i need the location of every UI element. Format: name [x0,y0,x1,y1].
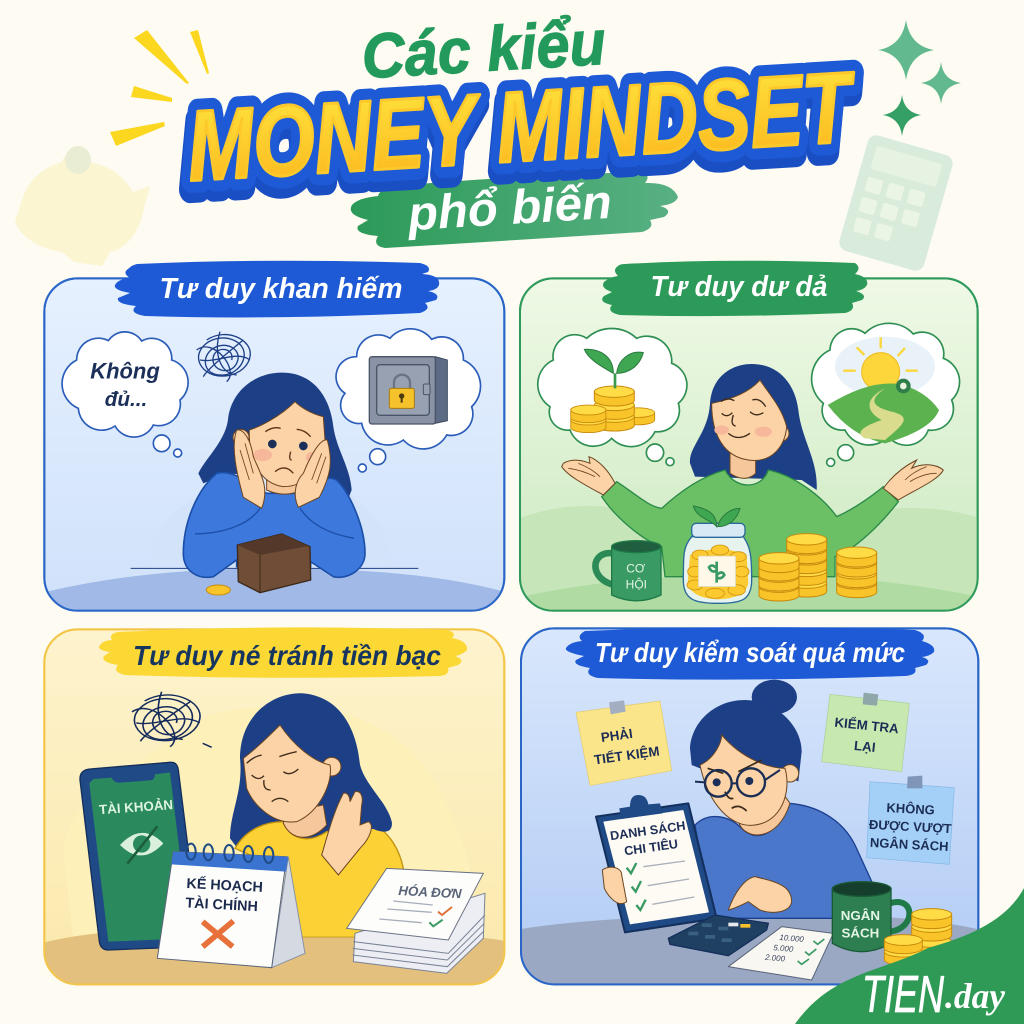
thought bubble: Không đủ: đủ... [105,388,147,411]
panel: Tư duy né tránh tiền bạc [40,629,510,988]
notepad with figures: 5.000 [773,943,794,954]
thought bubble: locked safe [336,329,481,472]
mug: Ngân sách: NGÂN [841,908,880,923]
mug: Cơ hội: HỘI [626,576,647,591]
background blob [150,487,390,570]
panel: Tư duy kiểm soát quá mức [515,628,982,988]
panel heading banner: Tư duy né tránh tiền bạc: Tư duy né tránh tiền bạc [133,640,441,671]
thought bubble: Không đủ [62,332,188,457]
brand corner: TIEN.day: TIEN [862,966,944,1024]
mug: Cơ hội [595,541,661,601]
clipboard: Danh sách chi tiêu: CHI TIÊU [623,836,679,858]
sticky note: Không được vượt ngân sách [867,776,954,864]
thought bubble: Không đủ: Không [90,358,160,383]
panel heading banner: Tư duy khan hiếm [115,261,439,317]
calculator [668,915,768,956]
panel: Tư duy dư dả [515,278,985,613]
jar of coins with sprout [683,506,752,603]
character: calm woman [562,364,943,577]
thought bubble: coins with sprout [538,328,687,466]
panel heading banner: Tư duy kiểm soát quá mức [566,627,934,680]
sticky note: Không được vượt ngân sách: NGÂN SÁCH [870,835,949,854]
character: avoiding woman [230,693,403,937]
sticky note: Kiểm tra lại [822,693,909,772]
bill stack: Hóa đơn [347,868,485,973]
scribble worry [132,692,212,747]
table [48,569,500,610]
panel heading banner: Tư duy khan hiếm: Tư duy khan hiếm [160,273,402,305]
desk calendar: Kế hoạch tài chính [157,844,305,968]
phổ biến brush banner [351,172,678,248]
clipboard: Danh sách chi tiêu [596,795,717,932]
yellow burst rays [110,30,209,146]
phone: Tài khoản [80,762,199,950]
green hills [521,506,977,596]
notepad with figures: 10.000 [779,933,805,944]
panel heading banner: Tư duy né tránh tiền bạc [99,627,467,678]
title line: Các kiểu: Các kiểu [360,8,608,92]
desk calendar: Kế hoạch tài chính: KẾ HOẠCH [186,875,263,896]
panel heading banner: Tư duy kiểm soát quá mức: Tư duy kiểm soát quá mức [595,637,905,668]
character: worried woman [183,373,365,577]
glow blob [72,706,413,936]
table [522,918,978,984]
sticky note: Kiểm tra lại: KIỂM TRA [834,715,900,736]
coin stacks [884,909,952,965]
mug: Ngân sách: SÁCH [841,925,879,940]
icon: coin [206,585,230,595]
ground [526,578,971,610]
icon: empty wallet [237,534,311,593]
panel heading banner: Tư duy dư dả: Tư duy dư dả [650,271,828,303]
thought bubble: sunrise and path [812,323,960,466]
panel: Tư duy khan hiếm [40,278,510,613]
sparkle icons [878,20,961,136]
bill stack: Hóa đơn: HÓA ĐƠN [398,883,462,901]
table [46,933,504,984]
character: controlling woman with glasses [690,680,873,918]
clipboard: Danh sách chi tiêu: DANH SÁCH [609,818,686,843]
notepad with figures [728,927,833,980]
title line: MONEY MINDSET: MONEY MINDSET [184,51,860,203]
title line: MONEY MINDSET: MONEY MINDSET [183,60,859,212]
coin stacks [759,534,877,601]
scribble worry [197,332,250,382]
panel heading banner: Tư duy dư dả [602,261,867,316]
sticky note: Kiểm tra lại: LẠI [853,738,876,755]
title line: MONEY MINDSET: MONEY MINDSET [184,51,860,203]
brand corner: TIEN.day: .day [945,976,1006,1016]
sticky note: Phải tiết kiệm: TIẾT KIỆM [593,743,660,768]
phone: Tài khoản: TÀI KHOẢN [99,797,173,817]
faded calculator [837,133,955,273]
sticky note: Phải tiết kiệm [576,700,672,786]
brand corner: TIEN.day [795,888,1024,1024]
mug: Cơ hội: CƠ [626,561,645,575]
faded piggy bank [15,146,150,266]
notepad with figures: 2.000 [764,953,786,964]
sticky note: Phải tiết kiệm: PHẢI [600,726,634,745]
sticky note: Không được vượt ngân sách: KHÔNG [886,800,935,818]
title [182,8,861,248]
desk calendar: Kế hoạch tài chính: TÀI CHÍNH [185,894,258,915]
phổ biến brush banner: phổ biến [404,176,613,241]
mug: Ngân sách [832,882,909,952]
sticky note: Không được vượt ngân sách: ĐƯỢC VƯỢT [869,817,952,836]
